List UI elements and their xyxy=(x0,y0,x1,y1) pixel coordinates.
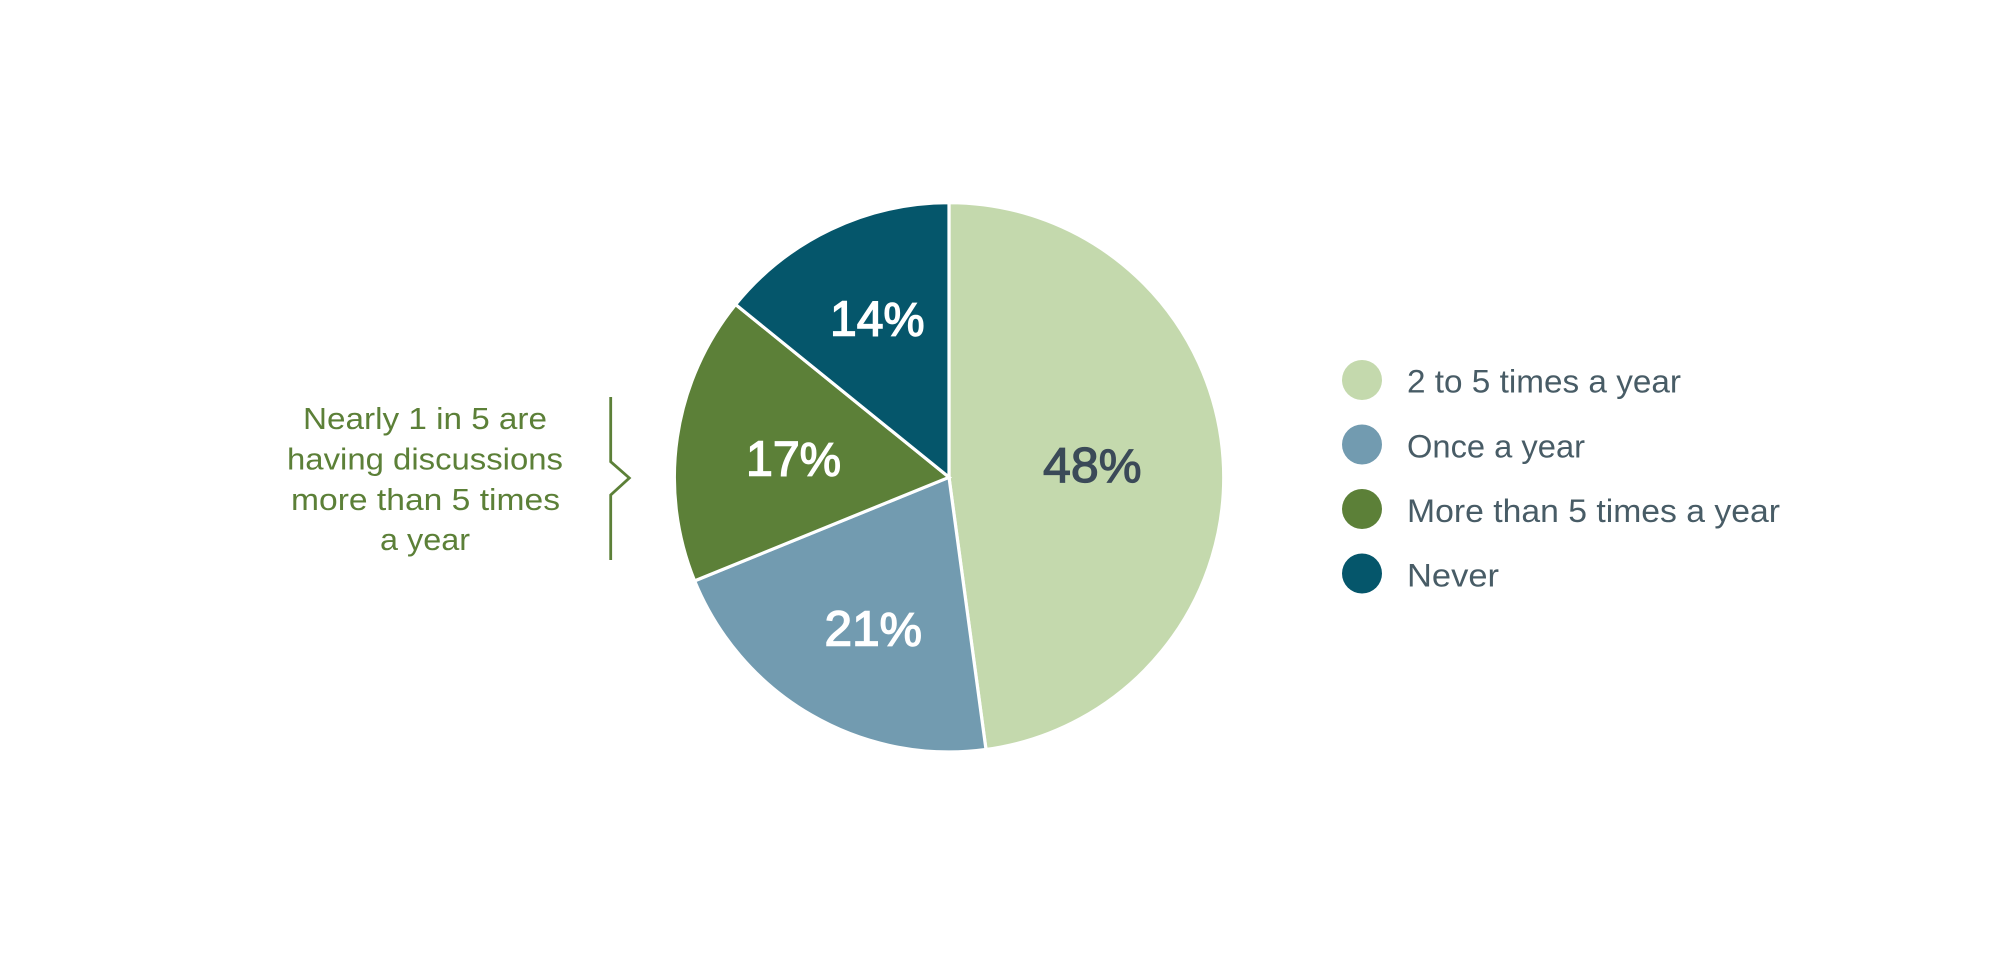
legend item: once a year: Once a year xyxy=(1407,428,1585,464)
legend item: more than 5 times a year: More than 5 times a year xyxy=(1407,493,1780,529)
bracket arrow xyxy=(611,397,629,560)
slice: more than 5 times a year 17% xyxy=(674,304,949,581)
value: 17%: 17% xyxy=(746,432,841,486)
value: 14%: 14% xyxy=(830,292,924,346)
legend item: never xyxy=(1342,554,1499,594)
legend xyxy=(1342,360,1780,594)
legend item: once a year xyxy=(1342,424,1585,464)
callout: nearly 1 in 5 xyxy=(287,401,563,557)
callout: nearly 1 in 5: more than 5 times xyxy=(291,482,560,517)
callout: nearly 1 in 5: having discussions xyxy=(287,442,563,476)
callout: nearly 1 in 5: a year xyxy=(380,522,470,557)
pie chart xyxy=(674,203,1224,752)
callout: nearly 1 in 5: Nearly 1 in 5 are xyxy=(303,401,547,436)
slice: 2 to 5 times a year 48% xyxy=(949,203,1224,750)
value: 48%: 48% xyxy=(1043,439,1142,493)
legend item: 2 to 5 times a year xyxy=(1342,360,1681,400)
slice: never 14% xyxy=(736,203,949,477)
legend item: never: Never xyxy=(1407,558,1499,594)
value: 21%: 21% xyxy=(824,602,922,656)
legend item: 2 to 5 times a year: 2 to 5 times a year xyxy=(1407,364,1681,400)
slice: once a year 21% xyxy=(695,477,986,752)
